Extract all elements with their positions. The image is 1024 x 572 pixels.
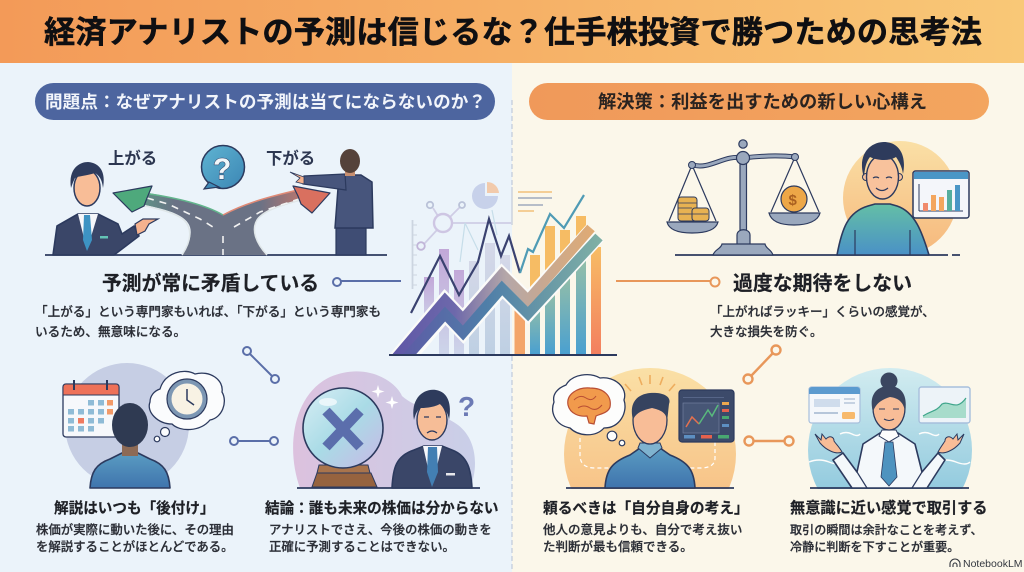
heading: contradictory forecasts: 予測が常に矛盾している [102, 272, 319, 295]
connector: contradictory to chart [333, 278, 401, 286]
body text [36, 522, 234, 554]
icon: trading monitor [679, 390, 734, 442]
body text: 他人の意見よりも、自分で考え抜い [543, 522, 742, 537]
body text [269, 522, 492, 554]
left section heading pill [35, 83, 495, 120]
title: 経済アナリストの予測は信じるな？仕手株投資で勝つための思考法 [44, 15, 982, 50]
background: right solution side [512, 63, 1024, 572]
body text: 株価が実際に動いた後に、その理由 [36, 522, 234, 537]
right section heading pill [529, 83, 989, 120]
icon: question speech bubble: ? [213, 153, 231, 186]
icon: analyst pointing left arrow [53, 162, 158, 255]
icon: smiling person [837, 142, 929, 255]
icon: question mark: ? [458, 391, 475, 422]
body text: 冷静に判断を下すことが重要。 [790, 539, 959, 554]
illustration: meditating trader [808, 368, 972, 489]
connector: horizontal left [230, 437, 278, 445]
panel: trade almost unconsciously [790, 368, 987, 554]
illustration: calendar, clock and man [63, 363, 224, 488]
heading: conclusion: 結論：誰も未来の株価は分からない [265, 499, 499, 517]
bars: left faded [424, 243, 510, 354]
icon: right chart window [919, 387, 970, 423]
panel: explanations after the fact [36, 363, 234, 554]
illustration: thinking man with monitor [552, 368, 736, 489]
heading: after the fact: 解説はいつも「後付け」 [54, 499, 215, 517]
body text: 大きな損失を防ぐ。 [710, 324, 823, 339]
connector: to chart right [616, 278, 720, 286]
body text: 取引の瞬間は余計なことを考えず、 [790, 522, 983, 537]
faded network and pie decor [412, 182, 552, 289]
icon: calendar [63, 380, 119, 437]
icon: meditating person [815, 372, 964, 488]
icon: crystal ball [303, 388, 383, 487]
panel: trust your own thinking [543, 368, 749, 554]
body text: アナリストでさえ、今後の株価の動きを [269, 522, 492, 537]
center dashed divider [511, 100, 513, 572]
icon: man from behind [90, 403, 170, 488]
body text: いるため、無意味になる。 [35, 325, 186, 339]
icon: left browser window [809, 387, 860, 423]
body text [543, 522, 742, 554]
illustration: forked road with two analysts [45, 146, 387, 255]
icon: balance scale [667, 140, 820, 255]
heading: own thinking: 頼るべきは「自分自身の考え」 [543, 499, 749, 517]
central chart [389, 182, 617, 370]
NotebookLM mark: NotebookLM [963, 558, 1023, 570]
illustration: crystal ball and analyst [293, 371, 480, 488]
body text [710, 304, 935, 339]
body text [35, 304, 381, 339]
connector: horizontal right [744, 436, 794, 446]
icon: rays [625, 375, 675, 391]
icon: thought cloud with clock [149, 371, 224, 442]
connector: diagonal right [744, 346, 780, 384]
body text: 正確に予測することはできない。 [269, 539, 455, 554]
heading: no excessive expectations: 過度な期待をしない [733, 272, 912, 295]
icon: thought cloud with brain [553, 375, 625, 446]
icon: worried analyst [392, 390, 472, 488]
background: left problem side [0, 63, 512, 572]
body text: を解説することがほとんどである。 [36, 539, 234, 554]
left section heading pill: 問題点：なぜアナリストの予測は当てにならないのか？ [45, 92, 486, 112]
zigzag line: dark navy [411, 219, 520, 313]
icon: question speech bubble [202, 146, 244, 189]
panel: contradictory forecasts [35, 146, 387, 339]
label: down: 下がる [266, 149, 315, 168]
icon: balance scale: $ [788, 192, 798, 209]
label: up: 上がる [108, 149, 157, 168]
right section heading pill: 解決策：利益を出すための新しい心構え [598, 91, 927, 112]
body text [790, 522, 983, 554]
illustration: balance and smiling person [667, 140, 969, 275]
icon: chart window [913, 171, 969, 218]
header band with title [0, 0, 1024, 63]
body text: 「上がる」という専門家もいれば、「下がる」という専門家も [35, 304, 381, 319]
heading: unconscious trading: 無意識に近い感覚で取引する [790, 499, 987, 517]
chart baseline [389, 354, 617, 356]
icon: forked road [113, 186, 330, 255]
icon: analyst from behind pointing right arrow [290, 149, 373, 255]
bars: right coloured [514, 216, 601, 354]
panel: nobody knows the future [265, 371, 499, 554]
body text: 「上がればラッキー」くらいの感覚が、 [710, 304, 935, 319]
body text: た判断が最も信頼できる。 [543, 539, 693, 554]
zigzag arrow band [389, 228, 599, 370]
zigzag line: teal [520, 195, 584, 273]
panel: no excessive expectations [667, 140, 969, 339]
connector: diagonal left [243, 347, 279, 383]
icon: man in polo [605, 393, 695, 488]
